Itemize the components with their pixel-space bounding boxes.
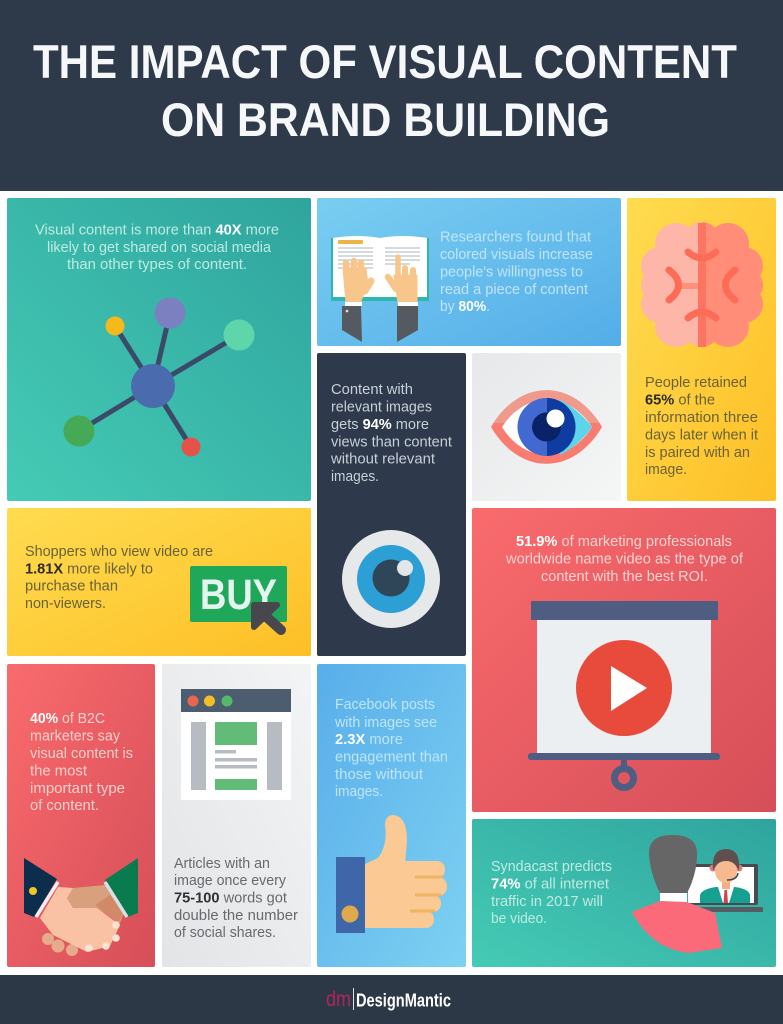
icon: video call illustration [632,835,763,953]
text: 74% internet traffic [491,858,612,927]
text: 75-100 words: Articles with an [174,855,270,872]
text: 2.3X more engagement [334,696,448,800]
panel: relevant images [317,353,466,656]
icon: almond eye [491,390,602,464]
text: 40% of B2C marketers [30,710,133,814]
icon: handshake [24,858,138,956]
text: 51.9% best ROI [505,533,744,585]
text: 40% of B2C marketers: the most [30,762,88,780]
text: 75-100 words [174,855,298,941]
text: 40% of B2C marketers: of content. [30,797,99,814]
text: 40X more likely to get shared [35,222,279,273]
header banner [0,0,783,191]
icon: network nodes [64,298,254,456]
icon: brain [641,222,763,347]
text: 75-100 words: double the number [174,907,298,924]
icon: projector screen with play button [528,601,720,788]
title [33,35,737,146]
panel: shared on social media [7,198,311,501]
text: 74% internet traffic: 74% of all internet [491,876,610,892]
text: 65% retained: information three [645,409,758,426]
text: 74% internet traffic: be video. [491,910,547,927]
panel: brain retention [627,198,776,501]
text: 94% more views [330,381,453,485]
logo: DesignMantic: DesignMantic [356,990,451,1010]
text: 94% more views: relevant images [331,398,432,416]
icon: round eye [342,530,440,628]
text: 1.81X more likely [25,543,213,612]
text: 75-100 words: of social shares. [174,924,276,941]
text: 2.3X more engagement: engagement than [335,748,448,766]
text: 1.81X more likely: Shoppers who view video are [25,543,213,560]
text: 40X more likely to get shared: than other types of content. [67,256,247,273]
text: 94% more views: without relevant [330,450,436,468]
text: 65% retained: days later when it [645,426,759,444]
text: 40X more likely to get shared: likely to get shared on social media [47,239,272,256]
text: 94% more views: images. [331,468,379,485]
text: 1.81X more likely: non-viewers. [25,595,106,612]
logo: DesignMantic [326,988,451,1011]
text: 94% more views: views than content [331,434,453,450]
text: colored visuals 80%: read a piece of content [440,281,589,298]
text: 65% retained: image. [645,461,687,478]
panel: eye illustration [472,353,621,501]
logo: DesignMantic: dm [326,988,351,1011]
text: 51.9% best ROI: 51.9% of marketing professionals [516,533,732,550]
text: 65% retained: People retained [645,374,747,391]
text: 94% more views: Content with [331,381,413,398]
icon: buy button with cursor [190,566,287,630]
text: 2.3X more engagement: with images see [334,714,437,731]
text: 75-100 words: 75-100 words got [174,890,288,906]
text: 40% of B2C marketers: important type [30,780,125,797]
footer banner [0,975,783,1024]
text: 2.3X more engagement: images. [335,783,383,800]
text: 40% of B2C marketers: visual content is [30,745,133,762]
panel: colored visuals and reading [317,198,621,346]
text: 1.81X more likely: purchase than [25,578,118,594]
text: 74% internet traffic: Syndacast predicts [491,858,612,875]
panel: facebook posts [317,664,466,967]
text: 75-100 words: image once every [174,872,286,889]
text: 94% more views: gets 94% more [331,416,429,433]
text: 51.9% best ROI: worldwide name video as the type of [505,550,744,568]
text: colored visuals 80%: colored visuals increase [440,246,593,263]
text: 2.3X more engagement: Facebook posts [335,696,435,713]
icon: browser window [181,689,291,800]
text: colored visuals 80%: people's willingness to [440,264,583,280]
text: 74% internet traffic: traffic in 2017 will [491,893,603,910]
panel: internet traffic video [472,819,776,967]
text: 40% of B2C marketers: marketers say [30,728,120,744]
icon: buy button with cursor: BUY [200,571,277,619]
text: 65% retained [645,374,759,478]
text: 40% of B2C marketers: 40% of B2C [30,710,105,727]
panel: shoppers and video [7,508,311,656]
text: colored visuals 80%: by 80%. [440,298,490,315]
text: 40X more likely to get shared: Visual content is more than 40X more [35,222,279,238]
title: ON BRAND BUILDING [161,93,610,146]
text: 65% retained: is paired with an [645,444,750,461]
text: 2.3X more engagement: those without [335,766,424,783]
text: colored visuals 80% [440,228,593,315]
icon: thumbs up [336,815,447,933]
panel: B2C marketers [7,664,155,967]
panel: articles with images [162,664,311,967]
panel: video ROI [472,508,776,812]
text: 51.9% best ROI: content with the best ROI. [541,568,708,585]
icon: open book with hands [331,236,429,342]
text: colored visuals 80%: Researchers found that [440,228,592,246]
text: 2.3X more engagement: 2.3X more [335,731,403,748]
text: 1.81X more likely: 1.81X more likely to [25,560,153,578]
text: 65% retained: 65% of the [645,392,715,408]
